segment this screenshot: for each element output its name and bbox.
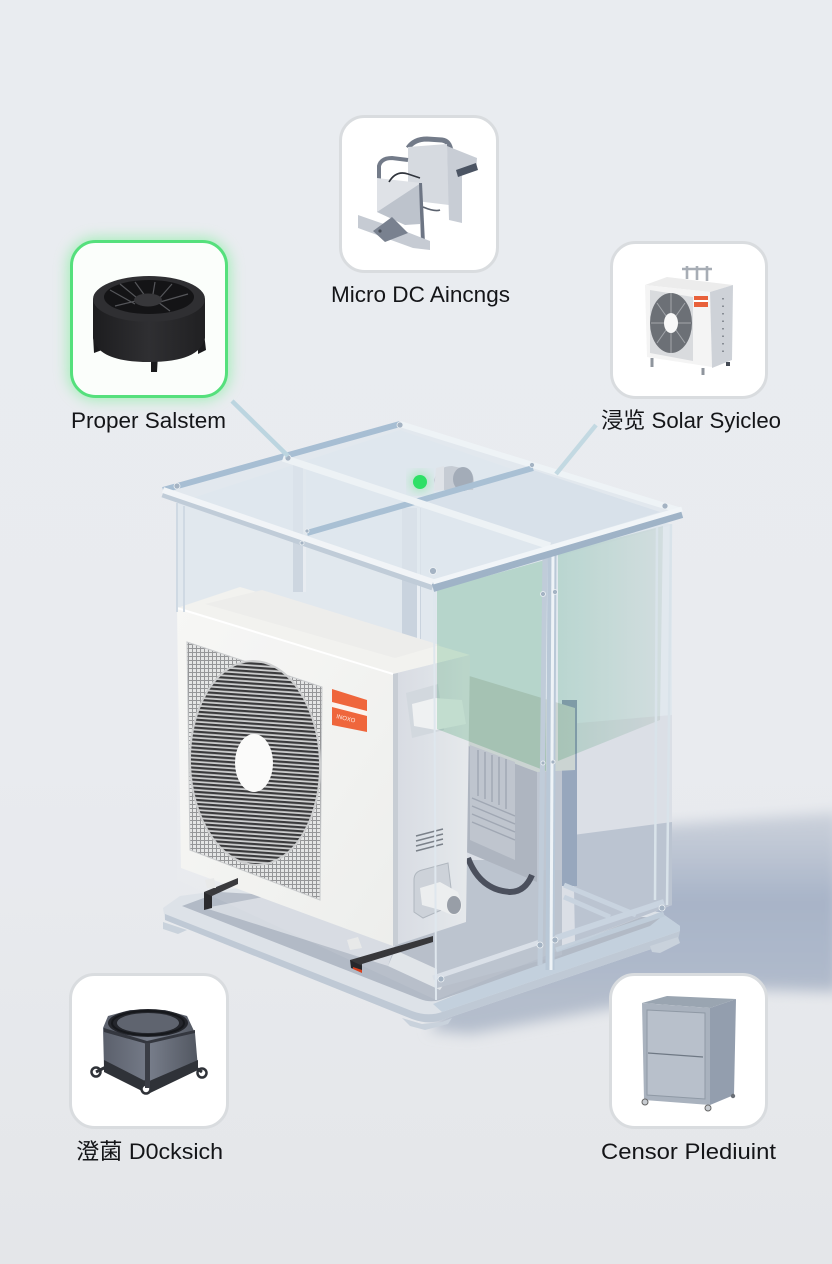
platform feet: [163, 922, 680, 1030]
label: proper salstem: Proper Salstem: [71, 408, 226, 433]
icon: black fan module: [93, 276, 206, 372]
front and lower bars: [433, 902, 664, 978]
frame bolts: [174, 422, 668, 982]
unit vents: [416, 829, 443, 851]
rear floor rails: [564, 885, 636, 917]
cylinder sensor: [434, 466, 474, 491]
green card glow: [68, 238, 230, 400]
icon: grey cabinet: [642, 996, 736, 1111]
panel: censor plediuint: [610, 974, 766, 1128]
top frame: [163, 422, 682, 982]
front face: [177, 608, 393, 946]
dark cable: [468, 858, 532, 892]
base platform: [163, 880, 680, 1030]
lower service valve: [414, 863, 462, 918]
interior floor and back wall: [177, 430, 672, 988]
glass panels: [177, 503, 672, 1000]
floor shadow: [430, 812, 832, 1034]
heat exchanger coil: [466, 675, 575, 882]
leader line: center: [418, 318, 422, 472]
card frame: [610, 974, 766, 1128]
panel: solar syicleo: [612, 242, 766, 398]
logo badge: [332, 689, 367, 732]
blue rear column: [562, 700, 577, 886]
green tinted panel right: [558, 526, 663, 761]
side face: [393, 655, 470, 946]
fan hub: [235, 734, 273, 792]
card frame: [72, 242, 226, 396]
label: d0cksich: 澄菌 D0cksich: [76, 1139, 223, 1164]
mesh grille: [187, 642, 322, 900]
logo badge: INOXO: [336, 714, 356, 725]
card frame: [70, 974, 228, 1128]
panel: proper salstem (highlighted): [68, 238, 230, 400]
icon: small AC unit: [645, 266, 733, 375]
green indicator dot: [410, 472, 430, 492]
top face: [177, 587, 470, 674]
label: micro dc aincngs: Micro DC Aincngs: [331, 282, 510, 307]
panel: micro dc aincngs: [340, 116, 498, 272]
green tinted panel left: [437, 560, 546, 771]
icon: metal brackets: [358, 139, 478, 250]
rear posts: [293, 462, 421, 648]
label: solar syicleo: 浸览 Solar Syicleo: [601, 408, 781, 433]
panel: d0cksich: [70, 974, 228, 1128]
enclosure with outdoor AC unit: [163, 422, 682, 1030]
mounting brackets: [204, 878, 433, 973]
icon: dark octagonal housing: [92, 1009, 206, 1094]
leader line: right: [556, 425, 596, 474]
leader line: left: [232, 401, 288, 456]
card frame: [612, 242, 766, 398]
AC unit: [177, 587, 470, 973]
card frame: [340, 116, 498, 272]
upper connector: [406, 684, 466, 738]
fan: [186, 659, 324, 867]
label: censor plediuint: Censor Plediuint: [601, 1139, 776, 1164]
